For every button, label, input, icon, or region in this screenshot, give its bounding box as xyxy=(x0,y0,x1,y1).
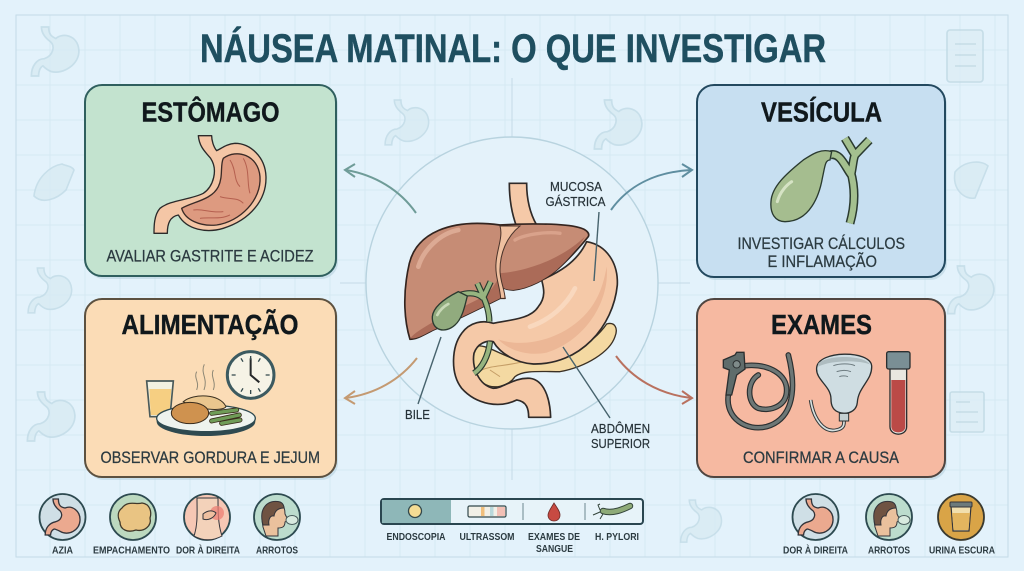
legend labels: ULTRASSOM xyxy=(460,531,515,543)
icon: endoscope xyxy=(723,352,792,428)
icon: belching: ARROTOS xyxy=(868,544,910,556)
arrow: to stomach xyxy=(345,164,416,213)
label: upper abdomen xyxy=(563,347,650,451)
arrow: to food xyxy=(345,358,417,404)
pancreas xyxy=(473,324,616,387)
label: mucosa xyxy=(546,179,606,281)
legend labels: SANGUE xyxy=(536,543,573,555)
icon: h. pylori xyxy=(593,504,630,519)
legend bar xyxy=(381,499,643,555)
icon: stomach xyxy=(154,136,266,233)
icon: heartburn xyxy=(40,494,86,556)
icon: right side pain xyxy=(176,494,240,556)
panel: exams xyxy=(697,299,947,480)
liver xyxy=(405,223,589,339)
central anatomy xyxy=(405,183,617,417)
icon: belching xyxy=(866,494,912,556)
gallbladder xyxy=(432,292,467,330)
label: upper abdomen: ABDÔMEN xyxy=(591,421,650,436)
heading: exams: EXAMES xyxy=(771,309,872,340)
panel: stomach xyxy=(85,85,338,279)
icon: blood drop xyxy=(548,503,560,521)
center circle xyxy=(366,137,658,429)
text: food: OBSERVAR GORDURA E JEJUM xyxy=(100,449,320,467)
illustration: meal and clock xyxy=(147,352,274,436)
icon: endoscopy xyxy=(408,504,422,518)
icon: bloating xyxy=(93,494,170,556)
icon: clock xyxy=(227,352,274,398)
legend labels: EXAMES DE xyxy=(528,531,580,543)
icon: glass xyxy=(147,381,173,417)
text: gallbladder xyxy=(738,234,905,271)
text: stomach: AVALIAR GASTRITE E ACIDEZ xyxy=(106,248,314,266)
panel: gallbladder xyxy=(697,85,947,280)
icon: dark urine: URINA ESCURA xyxy=(929,544,995,556)
label: upper abdomen: SUPERIOR xyxy=(591,436,650,451)
symptoms row right xyxy=(783,494,995,556)
icon: plate xyxy=(157,396,255,436)
icon: belching xyxy=(254,494,300,556)
legend labels: H. PYLORI xyxy=(595,531,639,543)
icon: dark urine xyxy=(929,494,995,556)
esophagus xyxy=(509,183,537,227)
heading: food: ALIMENTAÇÃO xyxy=(122,309,298,340)
legend labels: ENDOSCOPIA xyxy=(386,531,446,543)
label: bile: BILE xyxy=(405,407,430,422)
bile duct xyxy=(460,282,491,373)
label: bile xyxy=(405,337,441,422)
icon: right side pain: DOR À DIREITA xyxy=(176,544,240,556)
heading: gallbladder: VESÍCULA xyxy=(761,96,882,128)
illustration: exam devices xyxy=(723,352,910,434)
icon: heartburn: AZIA xyxy=(52,544,73,556)
icon: right side pain stomach: DOR À DIREITA xyxy=(783,544,848,556)
icon: ultrasound xyxy=(468,506,506,517)
legend labels xyxy=(386,531,639,555)
stomach and duodenum xyxy=(454,242,617,417)
symptoms row left xyxy=(40,494,300,556)
heading: stomach: ESTÔMAGO xyxy=(142,96,280,128)
label: mucosa: MUCOSA xyxy=(550,179,602,194)
label: mucosa: GÁSTRICA xyxy=(546,194,606,209)
icon: right side pain stomach xyxy=(783,494,848,556)
title: NÁUSEA MATINAL: O QUE INVESTIGAR xyxy=(200,26,826,71)
arrow: to gallbladder xyxy=(611,164,692,210)
text: gallbladder: E INFLAMAÇÃO xyxy=(768,251,877,271)
icon: belching: ARROTOS xyxy=(256,544,298,556)
text: gallbladder: INVESTIGAR CÁLCULOS xyxy=(738,234,905,253)
icon: blood tube xyxy=(887,352,910,434)
icon: ultrasound probe xyxy=(811,354,872,430)
panel: food xyxy=(85,299,338,480)
text: exams: CONFIRMAR A CAUSA xyxy=(743,449,899,467)
arrow: to exams xyxy=(616,356,692,404)
icon: gallbladder xyxy=(771,138,869,223)
icon: bloating: EMPACHAMENTO xyxy=(93,544,170,556)
